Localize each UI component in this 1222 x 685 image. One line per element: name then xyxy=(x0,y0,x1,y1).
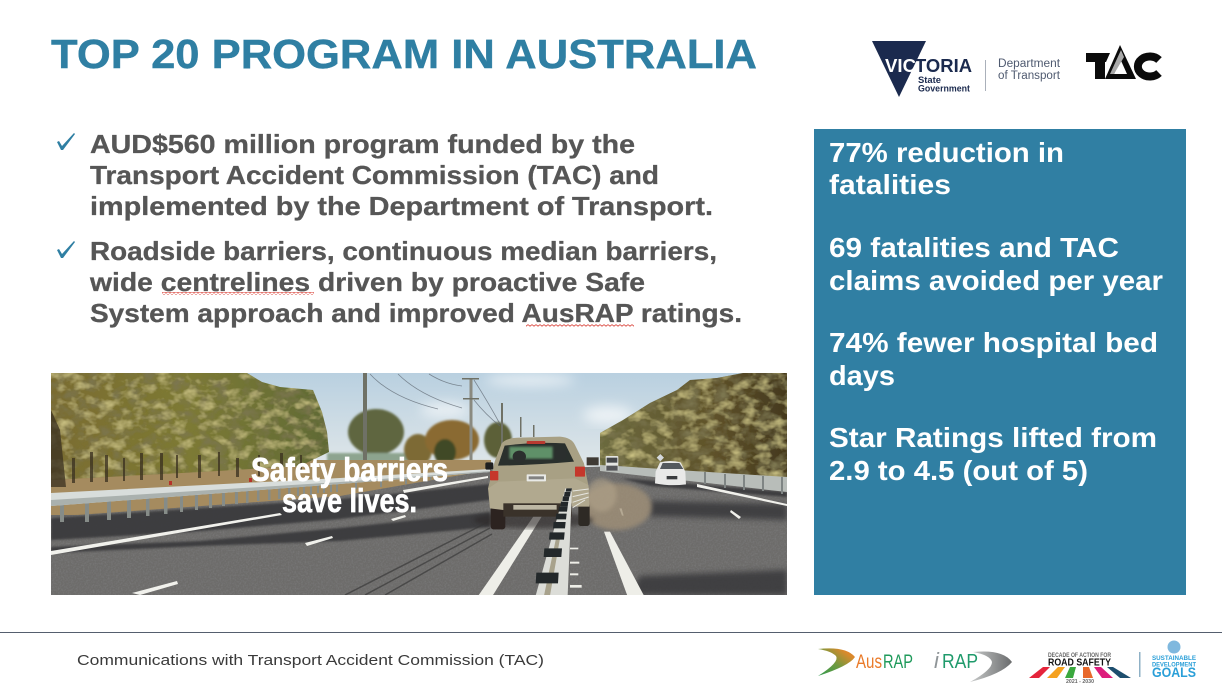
left trees xyxy=(51,460,491,515)
result: star ratings: 2.9 to 4.5 (out of 5) xyxy=(829,455,1088,486)
median barrier, car and lane lines in detail xyxy=(473,437,686,596)
background trees and building xyxy=(327,409,512,471)
logo: Victoria State Government, Department of Transport: VIC xyxy=(885,56,916,76)
logo: Decade of Action for Road Safety: 2021 - 2030 xyxy=(1066,679,1094,685)
logo: Victoria State Government, Department of Transport: Government xyxy=(918,84,970,94)
logo: Sustainable Development Goals: GOALS xyxy=(1152,664,1196,680)
logo: Victoria State Government, Department of Transport xyxy=(872,41,1061,97)
photo caption: save lives. xyxy=(282,482,417,519)
result: fatalities reduction xyxy=(829,137,1064,200)
distant vehicles xyxy=(587,457,599,465)
icon: check mark 2 xyxy=(57,241,75,258)
logo: Decade of Action for Road Safety: ROAD SAFETY xyxy=(1048,658,1111,668)
result: hospital bed days xyxy=(829,327,1158,391)
icon: check mark 1 xyxy=(57,133,75,150)
dust cloud xyxy=(582,483,652,530)
logo: iRAP xyxy=(934,648,1012,682)
footer source text: Communications with Transport Accident Commission (TAC) xyxy=(77,652,544,669)
logo: AusRAP: Aus xyxy=(856,651,882,673)
logo: iRAP: i xyxy=(934,648,940,673)
road xyxy=(51,466,787,595)
bullet 1 text: AUD$560 million program funded by the xyxy=(90,129,635,159)
photo caption: Safety barriers xyxy=(251,451,448,488)
bullet 1 text: implemented by the Department of Transport. xyxy=(90,191,713,221)
bullet list xyxy=(57,129,742,328)
logo: Victoria State Government, Department of Transport: State xyxy=(918,75,941,85)
title: TOP 20 PROGRAM IN AUSTRALIA xyxy=(51,31,757,77)
bullet 2 text: Roadside barriers, continuous median barriers, xyxy=(90,236,717,266)
poles and wires xyxy=(363,373,534,469)
result: star ratings: Star Ratings lifted from xyxy=(829,422,1157,453)
median barrier xyxy=(536,488,572,596)
tyre marks xyxy=(345,522,492,595)
photo: safety barrier on a highway with car xyxy=(51,373,787,596)
right guardrail xyxy=(600,465,787,492)
logo: Decade of Action for Road Safety: DECADE OF ACTION FOR xyxy=(1048,653,1112,659)
panel: key results xyxy=(814,129,1186,595)
logo: Sustainable Development Goals xyxy=(1152,640,1197,680)
logo: Victoria State Government, Department of Transport: TORIA xyxy=(915,56,972,76)
result: hospital bed days: days xyxy=(829,360,895,391)
photo caption xyxy=(252,456,448,513)
car shadow xyxy=(473,512,593,528)
result: fatalities reduction: fatalities xyxy=(829,169,951,200)
logo: Decade of Action for Road Safety xyxy=(1029,653,1131,685)
result: star ratings xyxy=(829,422,1157,486)
bullet 2 text: System approach and improved AusRAP ratings. xyxy=(90,298,742,328)
logo: Victoria State Government, Department of Transport: Department xyxy=(998,58,1061,70)
bullet 1 text: Transport Accident Commission (TAC) and xyxy=(90,160,659,190)
car xyxy=(491,507,505,529)
road shadows xyxy=(51,478,787,553)
road markings xyxy=(51,476,787,595)
result: fatalities and claims avoided: 69 fatalities and TAC xyxy=(829,232,1119,263)
logo: AusRAP xyxy=(818,648,913,676)
lane lines xyxy=(478,508,644,596)
logo: Sustainable Development Goals: DEVELOPMENT xyxy=(1152,662,1196,668)
right trees xyxy=(600,373,787,482)
result: hospital bed days: 74% fewer hospital bed xyxy=(829,327,1158,358)
result: fatalities and claims avoided: claims avoided per year xyxy=(829,265,1163,296)
bullet 2 text: wide centrelines driven by proactive Safe xyxy=(89,267,645,297)
left guardrail xyxy=(60,475,432,522)
logo: Victoria State Government, Department of Transport: of Transport xyxy=(998,70,1061,82)
logo: AusRAP: RAP xyxy=(883,651,913,673)
result: fatalities and claims avoided xyxy=(829,232,1163,296)
logo: TAC xyxy=(1086,45,1159,79)
bullet 1 text xyxy=(90,129,713,221)
logo: iRAP: RAP xyxy=(942,650,978,673)
logo: Sustainable Development Goals: SUSTAINABLE xyxy=(1152,655,1197,662)
result: fatalities reduction: 77% reduction in xyxy=(829,137,1064,168)
bullet 2 text xyxy=(89,236,742,328)
